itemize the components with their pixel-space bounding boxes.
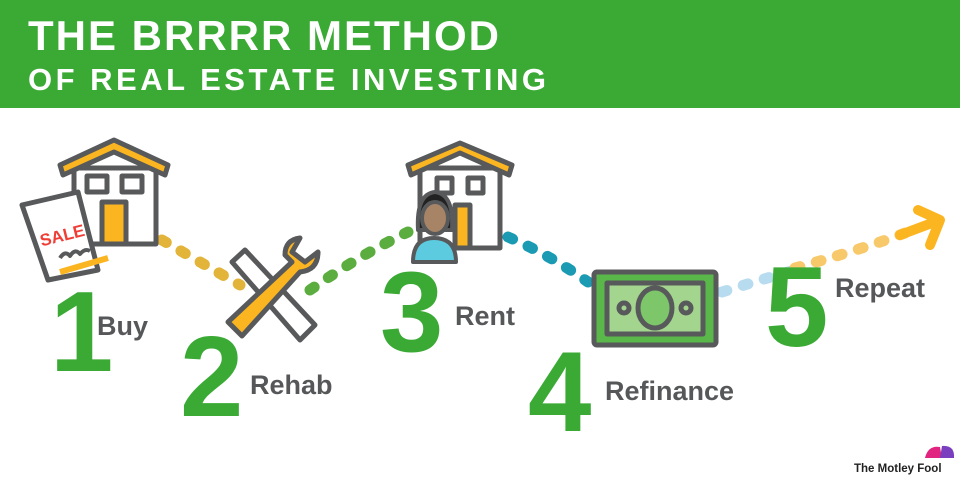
header band: [0, 0, 960, 108]
icon: person: [413, 192, 456, 262]
text: 3: [380, 249, 443, 376]
step 4: [528, 329, 734, 456]
logo: [854, 446, 954, 475]
text: Buy: [97, 311, 148, 341]
icon: tools: [228, 238, 318, 340]
title line 1: THE BRRRR METHOD: [28, 12, 501, 59]
text: Rent: [455, 301, 515, 331]
text: 2: [180, 314, 243, 441]
step 1: [50, 269, 148, 396]
dotted path: [162, 232, 905, 292]
title line 2: OF REAL ESTATE INVESTING: [28, 62, 549, 97]
text: Refinance: [605, 376, 734, 406]
text: 5: [765, 244, 828, 371]
step 5: [765, 244, 925, 371]
text: 1: [50, 269, 113, 396]
icon: sale scroll: SALE: [38, 221, 87, 250]
icon: house buy: [60, 140, 168, 244]
text: Repeat: [835, 273, 925, 303]
icon: arrow: [900, 210, 940, 245]
icon: sale scroll: [22, 192, 108, 280]
text: 4: [528, 329, 591, 456]
text: Rehab: [250, 370, 333, 400]
icon: house rent: [408, 143, 512, 248]
step 3: [380, 249, 515, 376]
logo: The Motley Fool: [854, 463, 942, 475]
icon: money: [594, 272, 716, 345]
step 2: [180, 314, 333, 441]
